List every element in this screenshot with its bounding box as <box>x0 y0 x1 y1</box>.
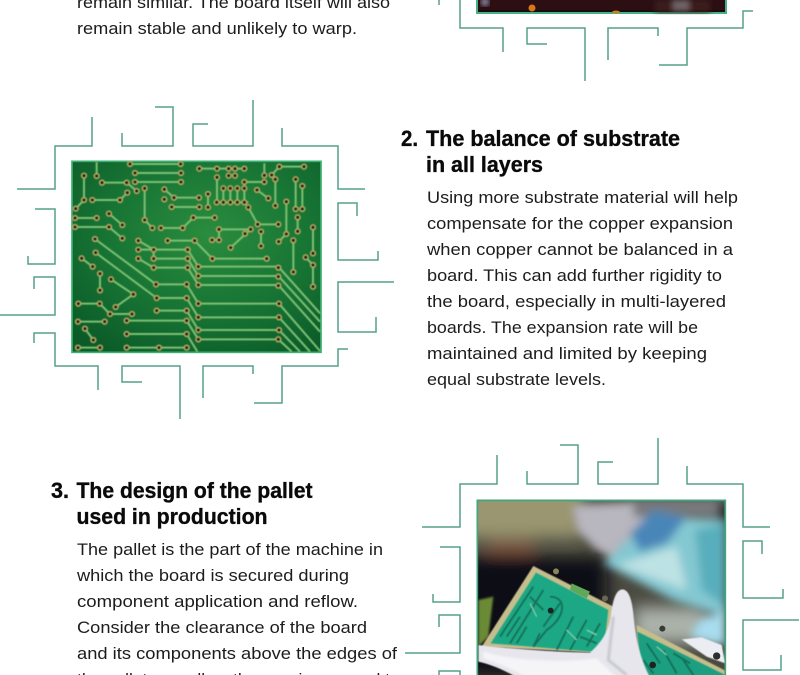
section 1 text tail: remain stable and unlikely to warp. <box>77 19 357 38</box>
photo: gloved hand holding circuit board <box>476 500 726 675</box>
section 3 heading: The design of the pallet <box>76 478 313 503</box>
section 3 heading: used in production <box>76 504 268 529</box>
section 2 body text: compensate for the copper expansion <box>427 214 733 233</box>
panel: section 2 board illustration <box>0 100 394 419</box>
section 3 body text: component application and reflow. <box>77 592 358 611</box>
section 2 body text: the board, especially in multi-layered <box>427 292 726 311</box>
circuit frame <box>405 438 799 675</box>
photo: top board crop <box>477 0 726 14</box>
illustration: green circuit board <box>72 161 321 352</box>
section 3 body text <box>76 540 397 675</box>
section 2 heading <box>401 126 680 177</box>
section 2 body text: when copper cannot be balanced in a <box>426 240 734 259</box>
section 2 body text: boards. The expansion rate will be <box>427 318 698 337</box>
circuit frame <box>405 0 799 81</box>
section 2 body text <box>426 188 738 389</box>
panel: top photo with circuit frame <box>405 0 799 81</box>
section 1 text tail <box>77 0 390 38</box>
section 3 body text: which the board is secured during <box>76 566 349 585</box>
section 2 body text: equal substrate levels. <box>427 370 606 389</box>
circuit frame <box>0 100 394 419</box>
section 2 heading: in all layers <box>426 152 543 177</box>
section 2 body text: maintained and limited by keeping <box>427 344 707 363</box>
panel: section 3 photo with circuit frame <box>405 438 799 675</box>
section 3 body text: and its components above the edges of <box>77 644 397 663</box>
section 3 heading <box>51 478 313 529</box>
section 2 body text: board. This can add further rigidity to <box>427 266 722 285</box>
section 3 heading: 3. <box>51 478 69 503</box>
section 3 body text: The pallet is the part of the machine in <box>77 540 383 559</box>
section 3 body text: Consider the clearance of the board <box>77 618 367 637</box>
section 2 body text: Using more substrate material will help <box>427 188 738 207</box>
section 2 heading: 2. <box>401 126 418 151</box>
section 2 heading: The balance of substrate <box>426 126 680 151</box>
